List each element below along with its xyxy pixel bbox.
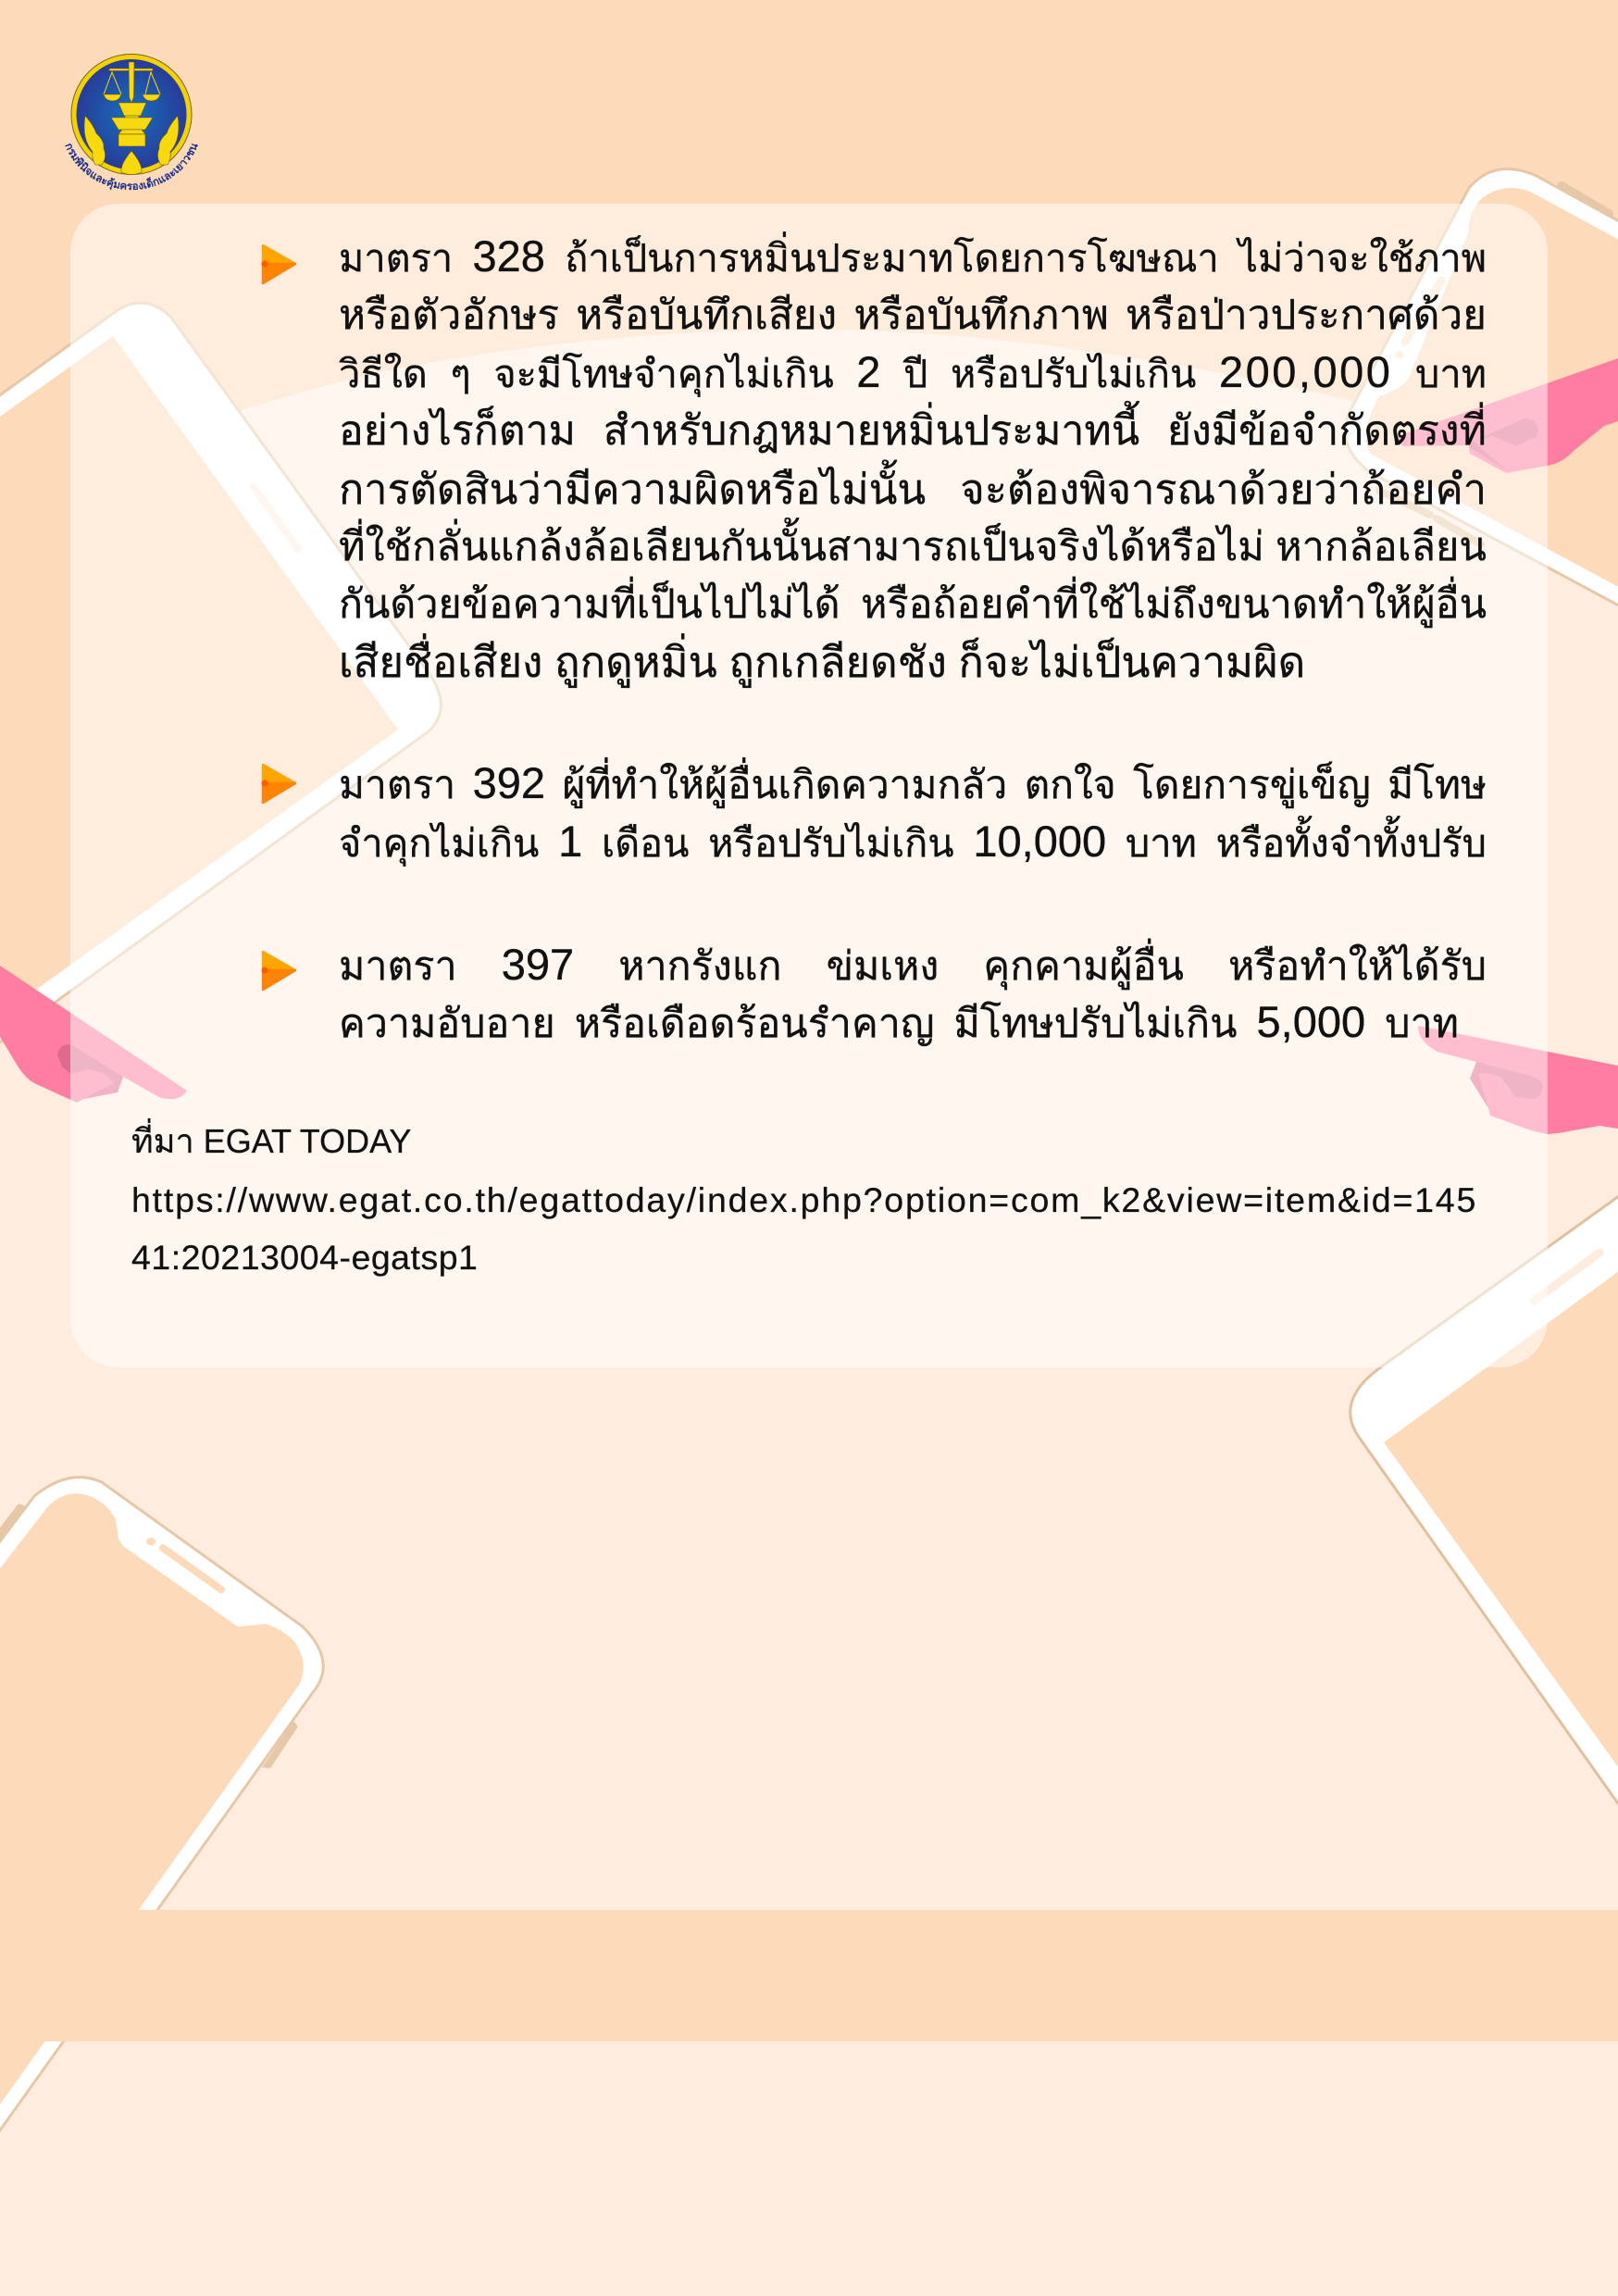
- bullet arrow 2: [261, 765, 295, 803]
- hand: left: [0, 966, 187, 1103]
- text block: section 392: [339, 757, 1487, 867]
- text block: section 328: กันด้วยข้อความที่เป็นไปไม่ได้ หรือถ้อยคำที่ใช้ไม่ถึงขนาดทำให้ผู้อื่น: [339, 582, 1487, 627]
- logo: department emblem: [65, 54, 198, 191]
- text block: section 328: ที่ใช้กลั่นแกล้งล้อเลียนกันนั้นสามารถเป็นจริงได้หรือไม่ หากล้อเลียน: [339, 525, 1487, 569]
- horizontal band: [0, 1910, 1618, 2041]
- text block: section 328: [339, 231, 1487, 689]
- text block: section 328: อย่างไรก็ตาม สำหรับกฎหมายหมิ่นประมาทนี้ ยังมีข้อจำกัดตรงที่: [339, 408, 1487, 454]
- logo caption text: กรมพินิจและคุ้มครองเด็กและเยาวชน: [65, 144, 198, 191]
- phone: top left: [0, 303, 441, 1049]
- bullet arrow 3: [261, 952, 295, 990]
- text block: section 328: เสียชื่อเสียง ถูกดูหมิ่น ถูกเกลียดชัง ก็จะไม่เป็นความผิด: [339, 639, 1305, 686]
- content panel: [70, 204, 1548, 1367]
- source credit: [131, 1118, 1477, 1277]
- source credit: https://www.egat.co.th/egattoday/index.php?option=com_k2&view=item&id=145: [131, 1179, 1477, 1218]
- hand: right: [1418, 1026, 1618, 1134]
- source credit: 41:20213004-egatsp1: [131, 1238, 478, 1277]
- text block: section 392: จำคุกไม่เกิน 1 เดือน หรือปรับไม่เกิน 10,000 บาท หรือทั้งจำทั้งปรับ: [339, 817, 1487, 866]
- text block: section 397: ความอับอาย หรือเดือดร้อนรำคาญ มีโทษปรับไม่เกิน 5,000 บาท: [339, 997, 1459, 1046]
- phone: lower right: [1350, 1189, 1618, 1819]
- phone: top right: [1345, 168, 1618, 611]
- text block: section 397: [339, 939, 1487, 1046]
- text block: section 328: การตัดสินว่ามีความผิดหรือไม่นั้น จะต้องพิจารณาด้วยว่าถ้อยคำ: [339, 466, 1487, 513]
- text block: section 328: หรือตัวอักษร หรือบันทึกเสียง หรือบันทึกภาพ หรือป่าวประกาศด้วย: [339, 293, 1487, 338]
- phone: lower left: [0, 1478, 323, 2143]
- text block: section 328: มาตรา 328 ถ้าเป็นการหมิ่นประมาทโดยการโฆษณา ไม่ว่าจะใช้ภาพ: [339, 231, 1487, 281]
- text block: section 397: มาตรา 397 หากรังแก ข่มเหง คุกคามผู้อื่น หรือทำให้ได้รับ: [339, 940, 1487, 989]
- hand: top right: [1398, 358, 1618, 473]
- text block: section 392: มาตรา 392 ผู้ที่ทำให้ผู้อื่นเกิดความกลัว ตกใจ โดยการขู่เข็ญ มีโทษ: [339, 758, 1487, 807]
- text block: section 328: วิธีใด ๆ จะมีโทษจำคุกไม่เกิน 2 ปี หรือปรับไม่เกิน 200,000 บาท: [339, 347, 1487, 396]
- source credit: ที่มา EGAT TODAY: [131, 1122, 411, 1160]
- bullet arrow 1: [261, 245, 295, 283]
